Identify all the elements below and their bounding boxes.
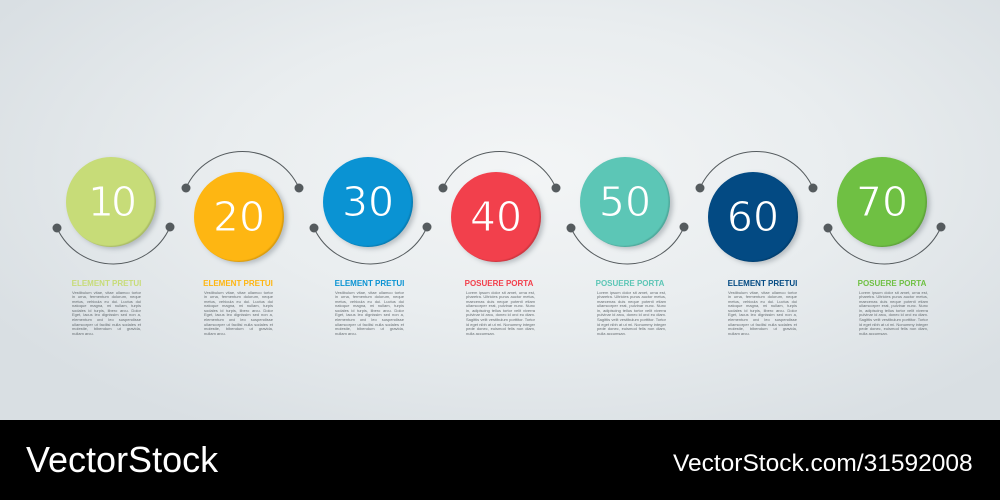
heading 7: POSUERE PORTA xyxy=(858,279,926,288)
heading 4: POSUERE PORTA xyxy=(465,279,533,288)
text block 3 xyxy=(335,291,404,336)
heading 2: ELEMENT PRETUI xyxy=(203,279,273,288)
watermark logo: VectorStock xyxy=(26,438,218,480)
heading 1: ELEMENT PRETUI xyxy=(72,279,141,288)
circle 10: 10 xyxy=(88,178,134,226)
heading 5: POSUERE PORTA xyxy=(596,279,664,288)
text block 4 xyxy=(466,291,535,336)
text block 6 xyxy=(728,291,797,336)
circle 40 xyxy=(451,172,541,262)
circle 50: 50 xyxy=(599,178,651,226)
text block 7 xyxy=(859,291,928,336)
text block 5 xyxy=(597,291,666,336)
circle 50 xyxy=(580,156,670,246)
circle 70 xyxy=(837,156,927,246)
circle 70: 70 xyxy=(856,178,908,226)
circle 20: 20 xyxy=(213,193,265,241)
circle 40: 40 xyxy=(470,193,522,241)
circle 10 xyxy=(66,156,156,246)
circle 20 xyxy=(194,172,284,262)
text block 1 xyxy=(72,291,141,336)
circle 60 xyxy=(708,172,798,262)
circle 30: 30 xyxy=(342,178,394,226)
heading 3: ELEMENT PRETUI xyxy=(335,279,404,288)
heading 6: ELEMENT PRETUI xyxy=(728,279,797,288)
circle 60: 60 xyxy=(727,193,779,241)
circle 30 xyxy=(323,156,413,246)
text block 2 xyxy=(204,291,273,336)
watermark url: VectorStock.com/31592008 xyxy=(673,450,973,476)
